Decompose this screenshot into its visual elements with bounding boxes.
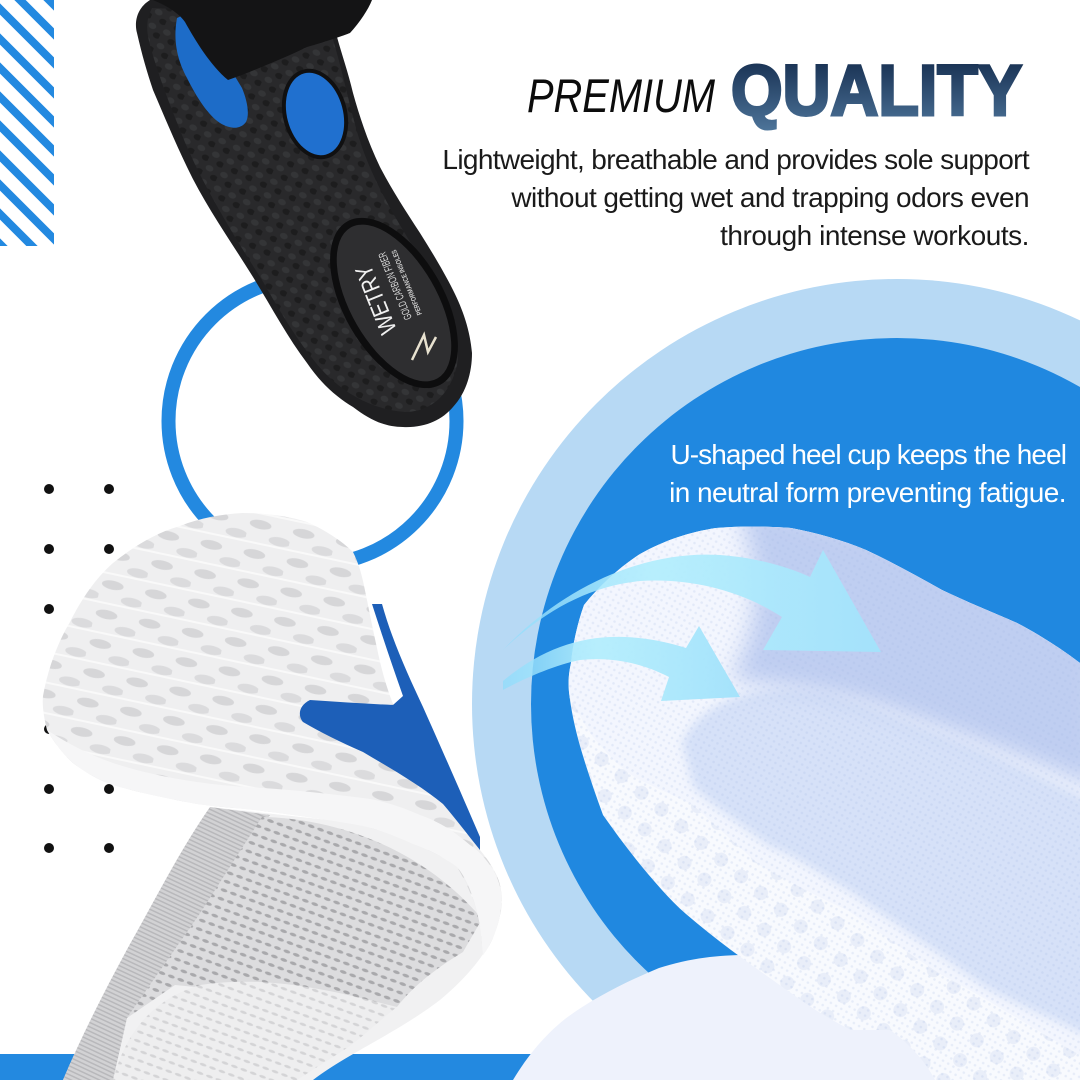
side band	[63, 807, 270, 1080]
dot grid	[44, 484, 114, 853]
callout: heel cup: in neutral form preventing fatigue.	[669, 477, 1066, 508]
badge subtitle: GOLD CARBON FIBER	[377, 250, 415, 321]
arrow: upper airflow	[503, 550, 881, 652]
blue ring	[168, 277, 456, 565]
white knit	[560, 500, 1080, 1055]
callout: heel cup: U-shaped heel cup keeps the heel	[670, 439, 1066, 470]
knit dots	[560, 510, 1080, 1080]
blue heel wedge	[300, 604, 480, 850]
inner blue circle	[531, 338, 1080, 1070]
blue pad: arch	[175, 12, 248, 128]
light lower mesh	[113, 982, 397, 1080]
badge brand name: WETRY	[351, 261, 403, 338]
large light blue circle	[472, 279, 1080, 1080]
badge logo mark	[412, 335, 436, 360]
decorative stripes panel	[0, 0, 54, 246]
black strap	[153, 0, 372, 80]
knit mesh	[127, 817, 482, 1018]
logo badge	[304, 197, 484, 409]
heel rim	[47, 730, 501, 955]
paragraph: quality description: through intense workouts.	[720, 220, 1029, 251]
heading: quality: QUALITY	[731, 52, 1022, 131]
light blue insole	[560, 500, 1080, 1080]
clipped knit surface	[560, 500, 1080, 1080]
paragraph: quality description: without getting wet and trapping odors even	[511, 182, 1029, 213]
badge tagline: PERFORMANCE INSOLES	[391, 248, 424, 316]
front insole tip	[513, 955, 960, 1080]
white insole: curled heel	[43, 513, 502, 955]
blue pad: round	[272, 61, 358, 167]
centre mesh	[682, 690, 1080, 1037]
black insole	[136, 0, 484, 427]
paragraph: quality description: Lightweight, breathable and provides sole support	[442, 144, 1029, 175]
bottom blue bar	[0, 1054, 540, 1080]
callout: heel cup	[669, 439, 1066, 508]
arrow: lower airflow	[503, 626, 740, 701]
heading: premium: PREMIUM	[527, 69, 716, 122]
paragraph: quality description	[442, 144, 1030, 251]
shaded upper band	[730, 500, 1080, 790]
white insole: mesh underside	[63, 807, 500, 1080]
